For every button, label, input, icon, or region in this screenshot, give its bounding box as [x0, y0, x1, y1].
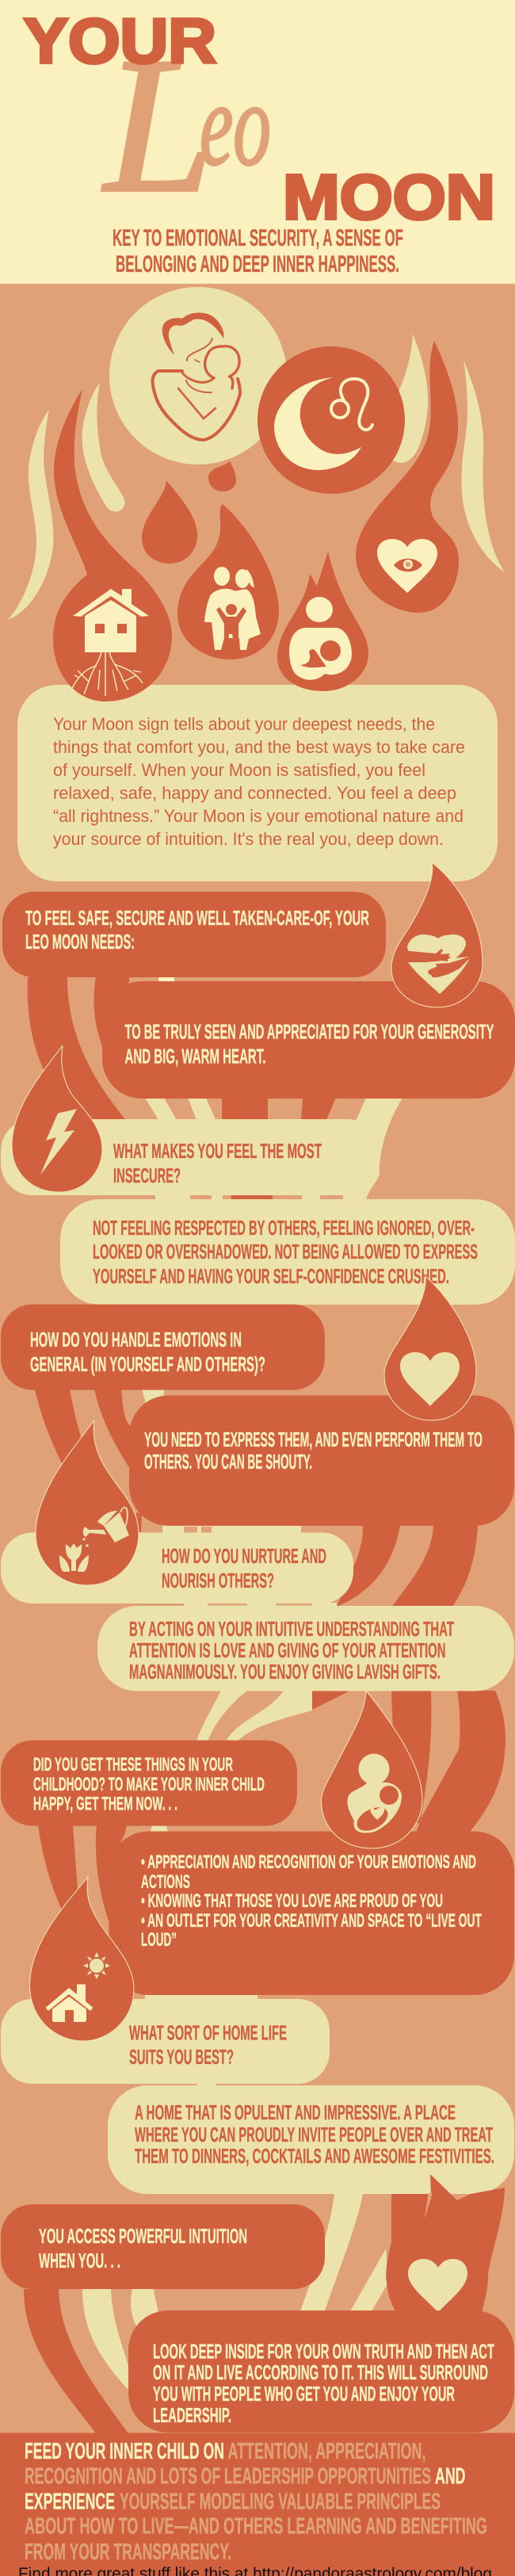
drop with mother and baby icon	[322, 1691, 422, 1848]
icon: home	[46, 1985, 93, 2022]
emotions question text: GENERAL (IN YOURSELF AND OTHERS)?	[30, 1354, 265, 1376]
panel: childhood answer bubble	[109, 1831, 514, 1995]
drop with family icon	[177, 504, 279, 659]
drop with home and sun icon	[30, 1877, 134, 2041]
childhood question text: HAPPY, GET THEM NOW. . .	[33, 1793, 177, 1815]
footer statement: AND	[435, 2463, 466, 2489]
intro text: relaxed, safe, happy and connected. You feel a deep	[53, 783, 456, 803]
intro text	[53, 714, 465, 849]
intuition question text	[39, 2226, 247, 2272]
flame: far right cream	[461, 360, 505, 572]
drop with hugged heart icon	[391, 862, 483, 1007]
medium drop	[142, 480, 197, 564]
drop with nursing mother icon	[277, 552, 368, 691]
seen text	[125, 1021, 494, 1068]
icon: hugged heart	[401, 934, 472, 994]
home question text	[129, 2023, 287, 2069]
childhood answer list: ACTIONS	[141, 1871, 190, 1893]
title: MOON: MOON	[283, 162, 495, 232]
insecure question text	[113, 1141, 322, 1187]
flame: far left cream	[8, 410, 53, 620]
footer statement: FEED YOUR INNER CHILD ON	[25, 2439, 224, 2464]
panel: home question bubble	[1, 1999, 330, 2084]
intuition answer text: LEADERSHIP.	[153, 2405, 231, 2427]
flame: inner left cream	[82, 382, 125, 511]
footer statement: EXPERIENCE	[25, 2490, 115, 2515]
section: emotions streams	[35, 1389, 478, 1609]
section: needs streams	[28, 977, 402, 1201]
childhood question text	[33, 1754, 265, 1815]
subtitle	[113, 225, 403, 277]
panel: intuition question bubble	[1, 2204, 325, 2289]
nurture answer text	[129, 1619, 454, 1684]
icon: sun	[83, 1952, 110, 1979]
icon: heart	[400, 1352, 460, 1406]
flame: right of moon cream	[388, 334, 428, 463]
insecure question text: WHAT MAKES YOU FEEL THE MOST	[113, 1141, 322, 1163]
emotions answer text	[144, 1429, 483, 1473]
icon: mother and child	[153, 312, 240, 440]
panel: emotions answer bubble	[129, 1395, 514, 1526]
panel: seen and appreciated bubble	[102, 981, 515, 1099]
drop with heart icon	[384, 1276, 476, 1420]
insecure question text: INSECURE?	[113, 1165, 181, 1187]
intro text: Your Moon sign tells about your deepest needs, the	[53, 714, 435, 734]
illustration: moon, flames and drops	[8, 287, 505, 701]
icon: family	[204, 567, 261, 650]
panel: needs bubble	[2, 892, 386, 977]
icon: lightning bolt	[40, 1109, 77, 1175]
emotions question text: HOW DO YOU HANDLE EMOTIONS IN	[30, 1329, 242, 1351]
childhood question text: DID YOU GET THESE THINGS IN YOUR	[33, 1754, 233, 1775]
intuition question text: WHEN YOU. . .	[39, 2250, 120, 2272]
panel: nurture question bubble	[1, 1533, 353, 1603]
intro text: things that comfort you, and the best ways to take care	[53, 737, 465, 757]
icon: crescent moon	[274, 377, 361, 470]
panel: insecure answer bubble	[60, 1199, 515, 1305]
intuition answer text	[153, 2341, 494, 2427]
moon circle with crescent and Leo glyph	[258, 346, 405, 494]
section: inner child streams	[38, 1691, 505, 2086]
insecure answer text	[93, 1217, 478, 1288]
nurture question text: HOW DO YOU NURTURE AND	[162, 1546, 326, 1568]
emotions question text	[30, 1329, 265, 1376]
nurture question text: NOURISH OTHERS?	[162, 1570, 274, 1592]
drop with lightning icon	[12, 1045, 102, 1192]
panel: intuition answer bubble	[128, 2310, 514, 2433]
panel: home answer bubble	[108, 2085, 514, 2194]
panel: insecure question bubble	[1, 1119, 380, 1195]
icon: mother holding baby	[347, 1753, 402, 1836]
emotions answer text: OTHERS. YOU CAN BE SHOUTY.	[144, 1451, 312, 1473]
intro text: of yourself. When your Moon is satisfied, you feel	[53, 760, 425, 780]
needs text	[25, 908, 369, 954]
small drop	[208, 461, 236, 491]
icon: nursing mother	[289, 597, 352, 680]
section: intuition streams	[24, 2194, 388, 2433]
panel: footer call to action	[0, 2433, 515, 2576]
home question text: WHAT SORT OF HOME LIFE	[129, 2023, 287, 2045]
home question text: SUITS YOU BEST?	[129, 2047, 234, 2069]
icon: watering can and tulip	[59, 1508, 129, 1572]
seen text: AND BIG, WARM HEART.	[125, 1046, 266, 1068]
title: YOUR: YOUR	[24, 6, 216, 76]
title: Leo script	[102, 17, 271, 232]
cream circle with mother and child icon	[109, 287, 287, 464]
title: Leo script: L	[102, 17, 214, 232]
header band	[0, 0, 515, 284]
intuition question text: YOU ACCESS POWERFUL INTUITION	[39, 2226, 247, 2248]
icon: house with roots	[71, 589, 149, 696]
childhood answer list: LOUD”	[141, 1929, 177, 1951]
icon: Leo glyph	[331, 379, 372, 430]
home answer text	[135, 2102, 494, 2168]
panel: intro bubble	[17, 685, 498, 881]
flame with heart icon	[386, 2174, 505, 2313]
nurture question text	[162, 1546, 326, 1592]
drop with watering can icon	[36, 1420, 139, 1585]
needs text: LEO MOON NEEDS:	[25, 931, 135, 954]
drop with house and roots icon	[53, 389, 172, 701]
icon: heart	[408, 2259, 467, 2313]
panel: childhood question bubble	[1, 1741, 297, 1826]
footer statement	[25, 2439, 487, 2565]
panel: emotions question bubble	[1, 1305, 325, 1390]
footer statement: FROM YOUR TRANSPARENCY.	[25, 2540, 231, 2565]
flame: right with heart eye	[356, 341, 459, 613]
title: Leo script: eo	[200, 59, 271, 190]
childhood answer list	[141, 1852, 482, 1951]
icon: heart with eye	[377, 539, 437, 593]
panel: nurture answer bubble	[97, 1606, 514, 1691]
intro text: your source of intuition. It's the real you, deep down.	[53, 829, 444, 849]
childhood question text: CHILDHOOD? TO MAKE YOUR INNER CHILD	[33, 1774, 265, 1795]
intro text: “all rightness.” Your Moon is your emotional nature and	[53, 806, 464, 826]
